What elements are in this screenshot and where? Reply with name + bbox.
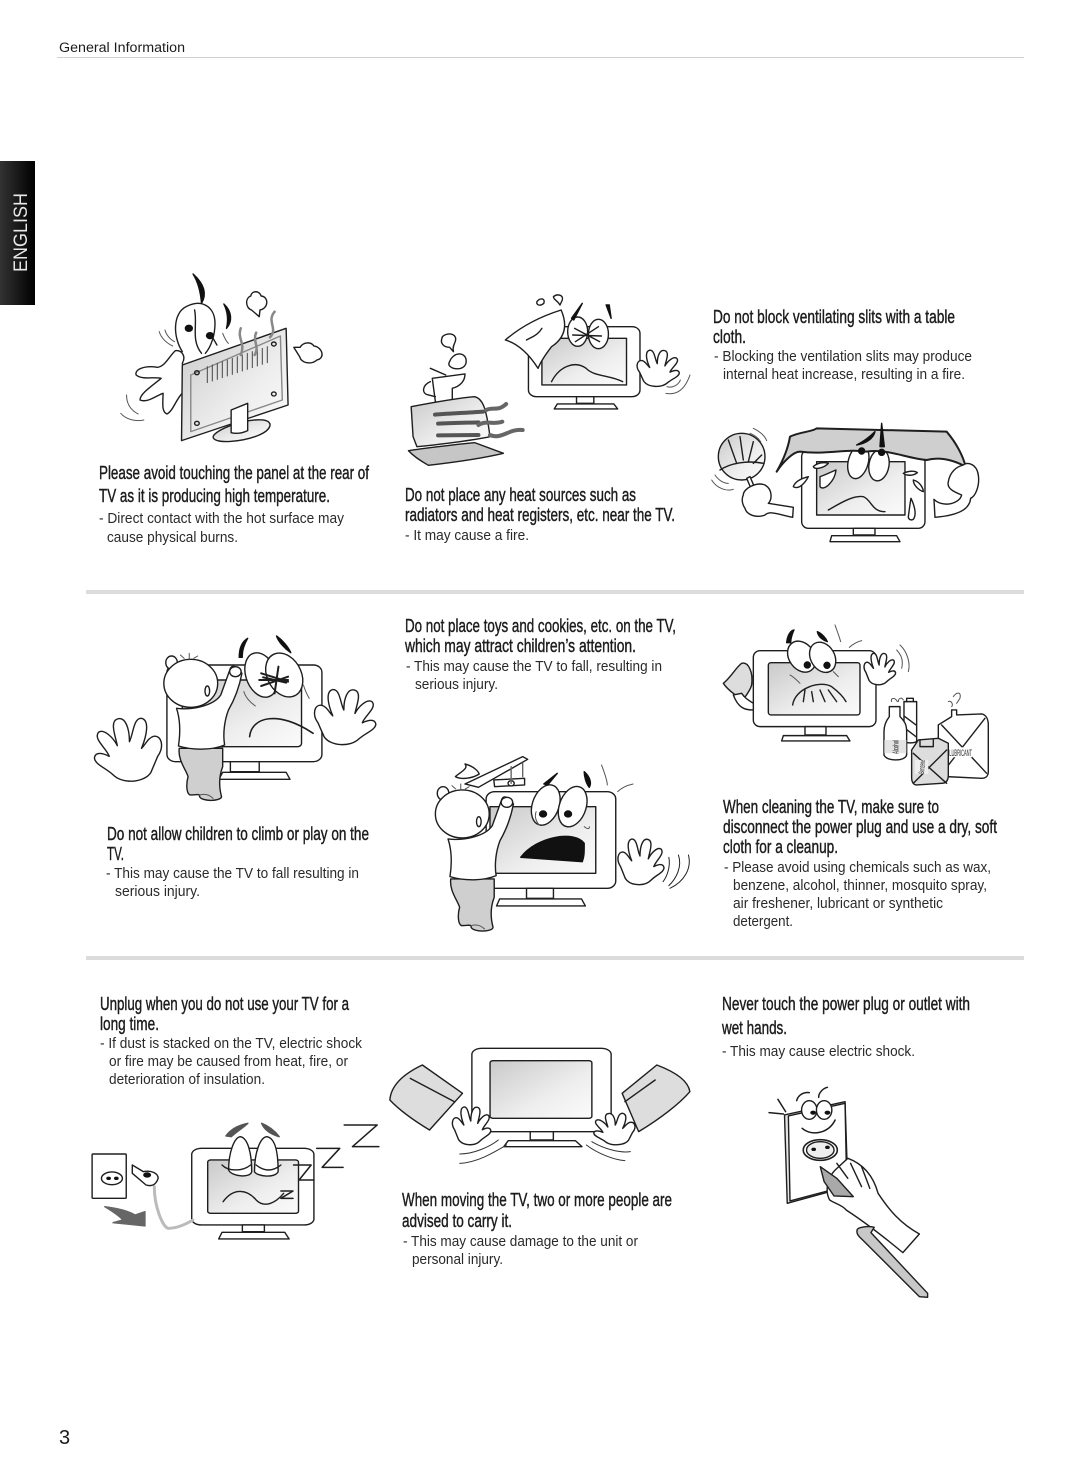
illustration: cleaning TV and chemicals: Alcohol: [892, 740, 901, 754]
text: wet hands warning: wet hands.: [721, 1018, 787, 1038]
text: wet hands warning: [721, 994, 970, 1060]
text: unplug warning: deterioration of insulation.: [109, 1072, 265, 1088]
text: children climbing warning: Do not allow children to climb or play on the: [107, 824, 369, 844]
text: toys and cookies warning: which may attract children’s attention.: [404, 636, 636, 656]
illustration: toy on TV with child: [435, 757, 689, 931]
text: unplug warning: long time.: [100, 1014, 159, 1034]
text: cleaning warning: benzene, alcohol, thinner, mosquito spray,: [733, 878, 987, 894]
text: moving warning: personal injury.: [412, 1252, 503, 1268]
text: wet hands warning: - This may cause electric shock.: [722, 1044, 915, 1060]
text: cleaning warning: [723, 797, 997, 930]
text: toys and cookies warning: serious injury.: [415, 677, 498, 693]
page number: 3: [59, 1427, 70, 1449]
language tab: ENGLISH: [0, 161, 35, 305]
text: heat sources warning: - It may cause a fire.: [405, 528, 529, 544]
text: unplug warning: - If dust is stacked on the TV, electric shock: [100, 1036, 363, 1052]
text: cleaning warning: disconnect the power plug and use a dry, soft: [723, 817, 997, 837]
illustration: cleaning TV and chemicals: Benzene: [917, 759, 927, 774]
text: heat sources warning: [405, 485, 675, 544]
text: heat sources warning: Do not place any heat sources such as: [405, 485, 636, 505]
text: ventilating slits warning: cloth.: [713, 327, 746, 347]
text: children climbing warning: [106, 824, 369, 900]
text: unplug warning: or fire may be caused from heat, fire, or: [109, 1054, 348, 1070]
illustration: sleeping TV unplugged: [92, 1123, 379, 1239]
text: cleaning warning: - Please avoid using chemicals such as wax,: [724, 860, 991, 876]
text: ventilating slits warning: - Blocking the ventilation slits may produce: [714, 349, 972, 365]
text: cleaning warning: When cleaning the TV, make sure to: [723, 797, 939, 817]
illustration: TV and child climbing: [94, 636, 376, 800]
text: ventilating slits warning: internal heat increase, resulting in a fire.: [723, 367, 965, 383]
text: unplug warning: Unplug when you do not use your TV for a: [100, 994, 350, 1014]
text: hot panel warning: - Direct contact with the hot surface may: [99, 511, 345, 527]
text: ventilating slits warning: [713, 307, 972, 383]
section header: General Information: General Information: [59, 40, 185, 55]
text: toys and cookies warning: [404, 616, 676, 693]
text: children climbing warning: serious injury.: [115, 884, 200, 900]
text: moving warning: advised to carry it.: [402, 1211, 512, 1231]
text: hot panel warning: [99, 463, 370, 546]
illustration: TV covered by cloth with fan: [712, 423, 979, 542]
text: cleaning warning: air freshener, lubricant or synthetic: [733, 896, 943, 912]
language tab: ENGLISH: ENGLISH: [11, 193, 32, 272]
text: cleaning warning: cloth for a cleanup.: [723, 837, 838, 857]
illustration: hot rear panel TV: [121, 274, 322, 442]
illustration: two people carrying TV: [390, 1048, 690, 1163]
text: children climbing warning: TV.: [107, 844, 124, 864]
text: children climbing warning: - This may cause the TV to fall resulting in: [106, 866, 359, 882]
illustration: cleaning TV and chemicals: LUBRICANT: [949, 748, 972, 758]
text: moving warning: - This may cause damage to the unit or: [403, 1234, 638, 1250]
illustration: cleaning TV and chemicals: [723, 625, 988, 785]
text: moving warning: When moving the TV, two or more people are: [402, 1190, 672, 1210]
text: toys and cookies warning: - This may cause the TV to fall, resulting in: [406, 659, 662, 675]
text: wet hands warning: Never touch the power plug or outlet with: [722, 994, 970, 1014]
text: heat sources warning: radiators and heat registers, etc. near the TV.: [405, 505, 675, 525]
text: hot panel warning: TV as it is producing high temperature.: [99, 486, 330, 506]
text: cleaning warning: detergent.: [733, 914, 793, 930]
text: moving warning: [402, 1190, 672, 1268]
text: hot panel warning: cause physical burns.: [107, 530, 238, 546]
text: hot panel warning: Please avoid touching the panel at the rear of: [99, 463, 370, 483]
text: toys and cookies warning: Do not place toys and cookies, etc. on the TV,: [405, 616, 676, 636]
text: ventilating slits warning: Do not block ventilating slits with a table: [713, 307, 955, 327]
illustration: heat source toaster and TV: [408, 295, 690, 465]
illustration: wet hand at outlet: [769, 1087, 928, 1297]
text: unplug warning: [100, 994, 363, 1088]
